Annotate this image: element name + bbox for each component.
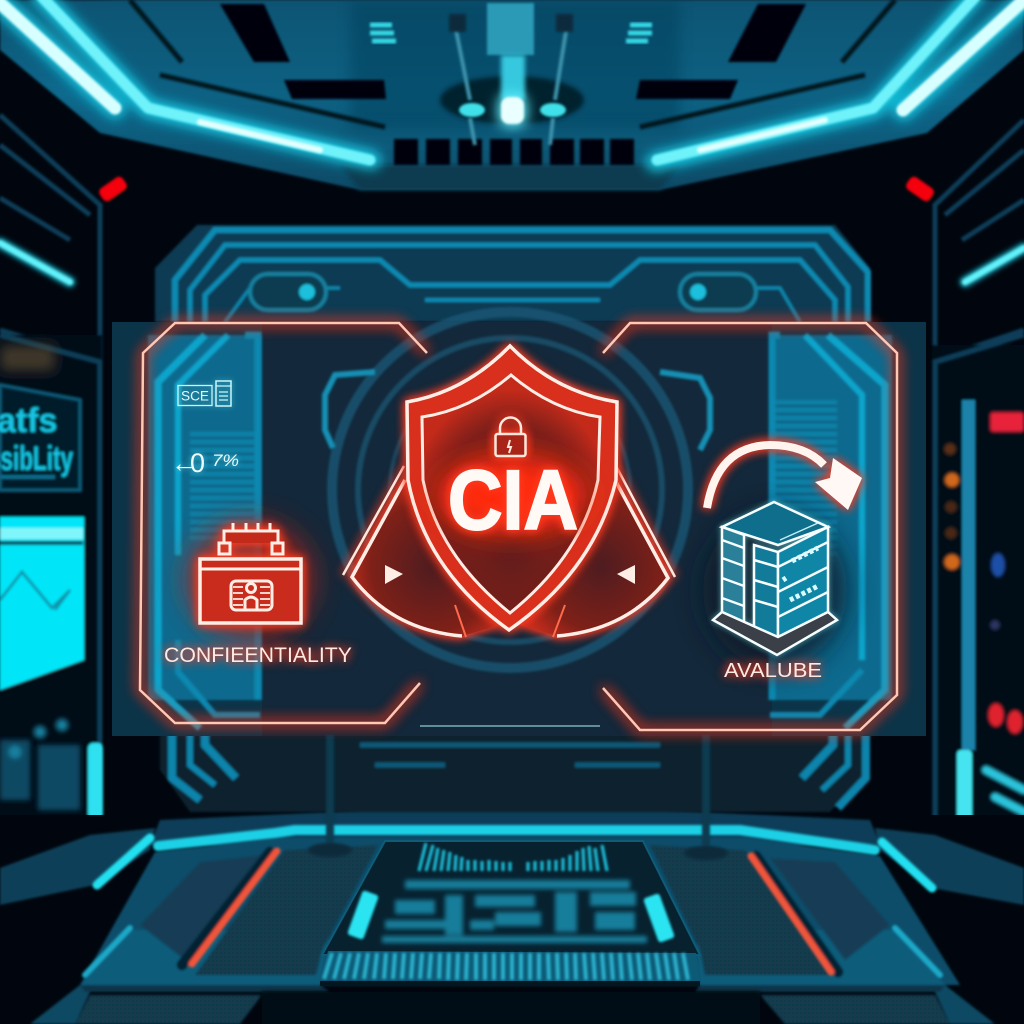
icon: padlock: [496, 418, 526, 456]
frame gauges: [250, 274, 756, 310]
ceiling neon strips: [0, 0, 1024, 162]
shield: [407, 346, 617, 630]
red corner lights: [97, 175, 936, 203]
label: availability: AVALUBE: [724, 660, 822, 682]
center dark field: [262, 322, 772, 736]
right frame bracket: [603, 323, 897, 730]
right circuitry: [660, 335, 892, 728]
left wall cyan bar: [88, 743, 103, 819]
readout value: 0: [190, 448, 205, 478]
glass hologram panel: [112, 312, 926, 736]
ceiling small lights: [370, 25, 652, 41]
lower frame chevrons: [172, 725, 866, 808]
title: CIA: CIA: [448, 453, 578, 547]
console circuit map: [382, 880, 647, 943]
right wall light stripe: [965, 248, 1024, 282]
confidentiality icon: chip card: [186, 520, 314, 640]
red glow behind letters: [436, 455, 588, 535]
left wall text screen: [0, 385, 80, 490]
label: confidentiality: CONFIEENTIALITY: [164, 644, 352, 667]
left data readouts: [171, 381, 239, 478]
right wall status lights: [944, 412, 1024, 812]
teal frame behind hologram: [155, 225, 870, 812]
readout value: 7%: [212, 451, 239, 470]
readout value: [171, 448, 239, 478]
left wall: [0, 115, 103, 835]
left frame bracket: [140, 323, 427, 723]
floor red indicator strips: [182, 851, 838, 972]
floor cyan edge bar: [85, 830, 940, 975]
ceiling: [0, 0, 1024, 190]
right wing: [520, 466, 675, 637]
right wall: [932, 120, 1024, 835]
control console: [320, 841, 700, 986]
ceiling vents and black slots: [220, 4, 806, 165]
SCE label box: SCE: [181, 388, 209, 404]
ceiling dark recess lines: [130, 0, 895, 127]
central CIA emblem: [343, 346, 675, 637]
availability arrow: [707, 445, 862, 510]
left wall light stripe: [0, 243, 70, 282]
left red light: [97, 175, 129, 203]
right red light: [904, 175, 936, 203]
left lower wall blocks: [0, 719, 80, 810]
floor: [0, 810, 1024, 1024]
panel stands: [308, 735, 728, 860]
concentric rings: [332, 312, 688, 668]
readout value: ←: [171, 448, 197, 478]
left circuitry: [148, 335, 375, 728]
bottom shadow: [262, 992, 760, 1024]
console right cyan button: [643, 893, 675, 943]
console left cyan button: [347, 890, 379, 940]
left wall bright chart screen: [0, 517, 84, 690]
availability icon: server building: [703, 502, 847, 668]
panel bottom highlight: [420, 725, 600, 727]
console vent strip: [320, 951, 700, 986]
ceiling hanging lamp: [440, 3, 584, 145]
console equalizer bars: [419, 843, 607, 871]
red hologram frame: [140, 323, 897, 730]
left wing: [343, 466, 500, 637]
